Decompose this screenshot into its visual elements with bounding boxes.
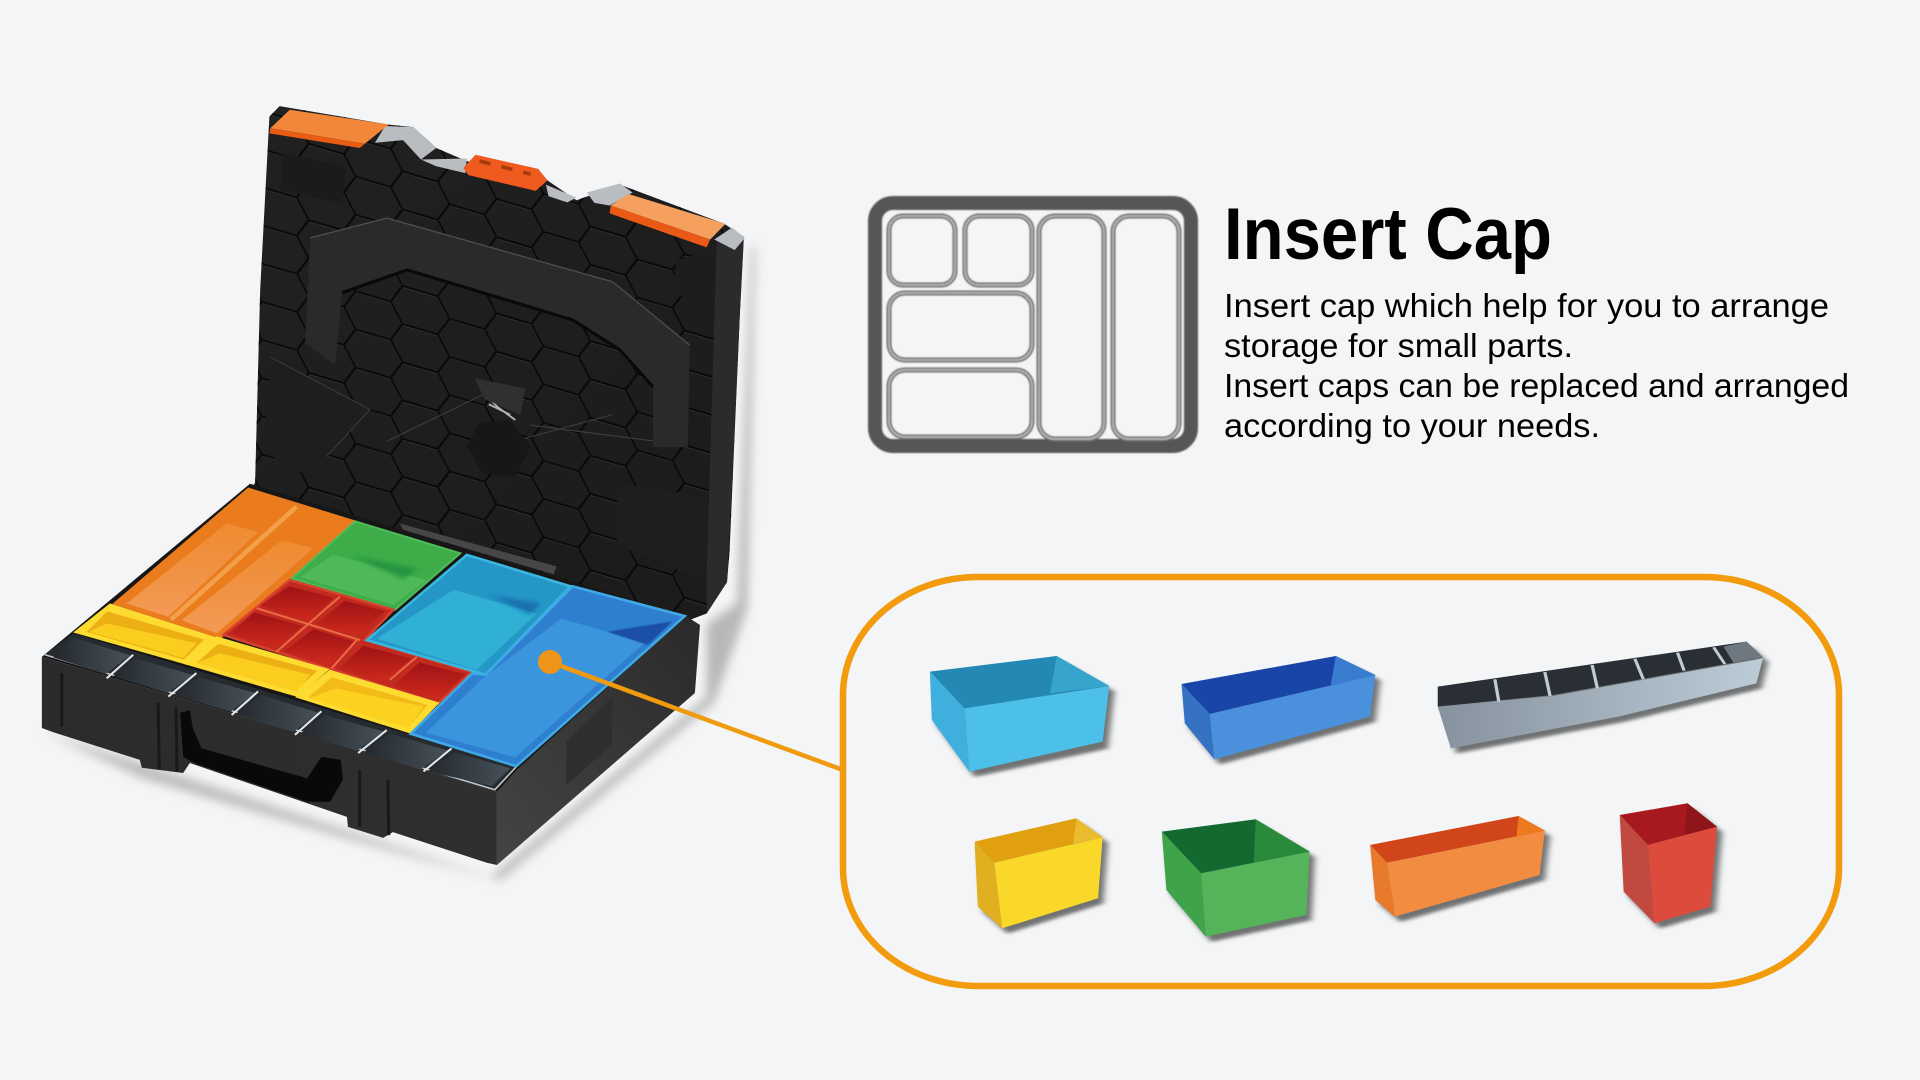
panel: insert cap assortment: [843, 577, 1839, 986]
tray top: [42, 484, 686, 792]
description text: storage for small parts.: [1224, 328, 1573, 365]
centre orange latch: [463, 155, 547, 191]
tray frame: [875, 203, 1191, 446]
description text: [1224, 288, 1849, 445]
front ribs: [62, 673, 389, 835]
insert boxes group: [930, 642, 1768, 942]
orange corner caps and silver hinges: [269, 110, 745, 250]
cyan insert: [367, 555, 570, 675]
description text: Insert caps can be replaced and arranged: [1224, 368, 1849, 405]
right compartment floor: [182, 540, 313, 633]
orange inserts: [115, 489, 354, 638]
compartment highlights: [889, 216, 1179, 439]
callout dot: [538, 650, 562, 674]
right side face: [497, 616, 700, 865]
box: green: [1162, 819, 1315, 942]
callout connector line: [538, 650, 843, 770]
product: open tool case with coloured inserts: [42, 101, 755, 880]
left compartment floor: [127, 524, 258, 617]
green insert: [292, 521, 460, 610]
right orange cap: [611, 194, 726, 240]
box: grey seven-compartment strip: [1438, 642, 1768, 754]
large blue insert: [411, 586, 685, 766]
case base: [42, 484, 700, 865]
description text: according to your needs.: [1224, 408, 1600, 445]
centre reflection: [485, 394, 515, 420]
description text: Insert cap which help for you to arrange: [1224, 288, 1829, 325]
left orange cap: [270, 110, 389, 144]
carrying handle: [180, 710, 343, 802]
red inserts: [223, 580, 472, 703]
grey front compartment strip: [45, 633, 516, 790]
open lid: [245, 101, 755, 624]
silver hinge pieces: [375, 126, 745, 250]
raised C-shaped moulding in lid: [305, 218, 690, 447]
title: Insert Cap: [1224, 194, 1552, 275]
box: yellow: [975, 818, 1108, 934]
box: orange: [1370, 816, 1550, 922]
box: dark blue: [1181, 656, 1381, 765]
icon: insert tray outline: [875, 203, 1191, 446]
box: red: [1620, 803, 1722, 929]
yellow inserts: [77, 605, 437, 732]
infographic canvas: [42, 106, 1847, 990]
box: cyan: [930, 656, 1114, 777]
case shadow: [42, 247, 755, 880]
tray compartments: [889, 216, 1179, 439]
compartments: [53, 638, 130, 674]
dividers: [107, 655, 452, 771]
front face: [42, 657, 497, 865]
